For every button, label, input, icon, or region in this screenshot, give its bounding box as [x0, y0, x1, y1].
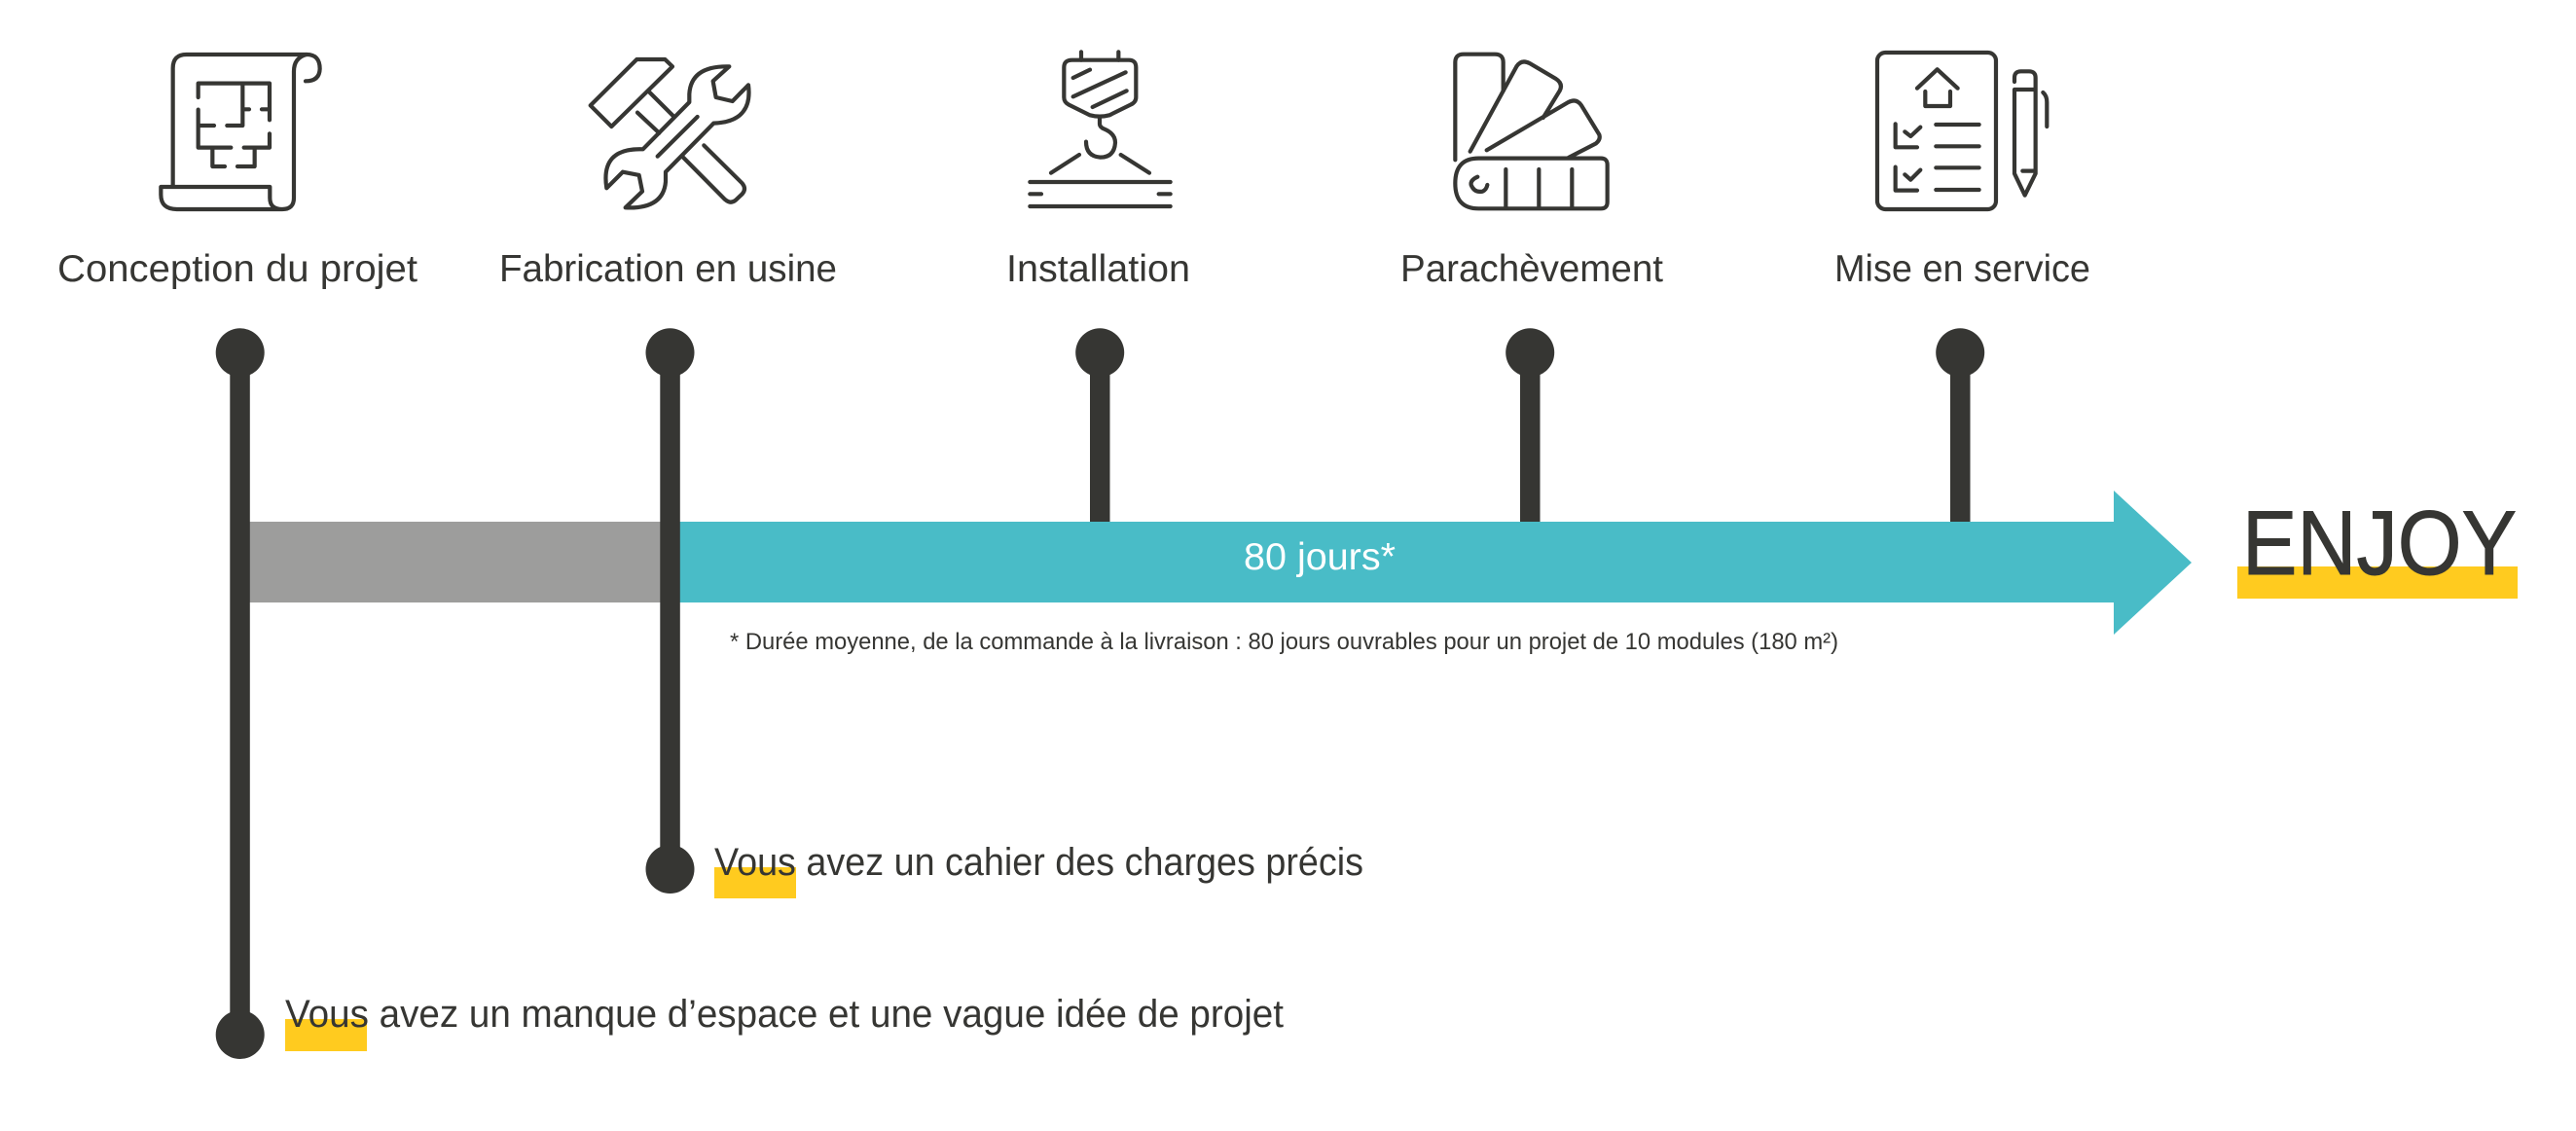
stem and dot: Conception du projet	[216, 328, 265, 1059]
callout: manque d'espace: Vous avez un manque d’espace et une vague idée de projet	[285, 993, 1284, 1036]
duration label: 80 jours*	[1244, 536, 1396, 578]
stem and dot: Parachèvement	[1506, 328, 1554, 522]
stem and dot: Fabrication en usine	[646, 328, 695, 894]
label: Parachèvement: Parachèvement	[1400, 248, 1663, 290]
stem and dot: Installation	[1075, 328, 1124, 522]
grey pre-production bar	[243, 522, 667, 602]
icon: crane hook	[1030, 52, 1171, 206]
ENJOY heading with highlight: ENJOY	[2242, 492, 2517, 594]
footnote: * Durée moyenne, de la commande à la livraison : 80 jours ouvrables pour un projet de 10 modules (180 m²)	[730, 629, 1838, 655]
teal timeline arrow	[671, 491, 2192, 635]
stem and dot: Mise en service	[1936, 328, 1984, 522]
label: Mise en service: Mise en service	[1834, 248, 2090, 290]
icon: hammer and wrench	[591, 59, 749, 207]
label: Fabrication en usine: Fabrication en usine	[499, 248, 837, 290]
icon: colour swatch fan	[1455, 55, 1608, 208]
icon: checklist and pen	[1877, 53, 2047, 209]
callout: cahier des charges: Vous avez un cahier des charges précis	[714, 841, 1363, 884]
label: Installation: Installation	[1006, 248, 1190, 290]
label: Conception du projet: Conception du projet	[57, 248, 417, 290]
icon: blueprint scroll	[161, 55, 320, 209]
